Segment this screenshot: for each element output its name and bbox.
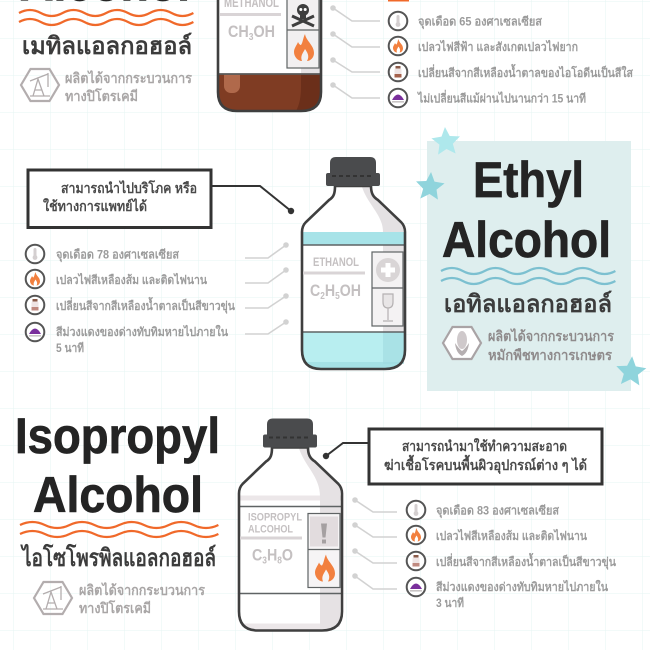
icon: iodine bottle xyxy=(389,63,407,81)
star xyxy=(431,126,461,155)
bottle: isopropyl: 8 xyxy=(277,556,282,566)
text: iodine: เปลี่ยนสีจากสีเหลืองน้ำตาลเป็นสีขาวขุ่น xyxy=(436,552,617,570)
property list: ethyl: 5 นาที xyxy=(56,341,84,355)
text: iodine: เปลี่ยนสีจากสีเหลืองน้ำตาลเป็นสีขาวขุ่น xyxy=(56,296,236,314)
title: Isopropyl xyxy=(15,408,220,464)
property list: ethyl xyxy=(26,243,288,355)
icon: thermometer xyxy=(407,501,425,519)
callout: ethanol use: สามารถนำไปบริโภค หรือ xyxy=(61,179,197,196)
star xyxy=(615,355,647,386)
panel: ethyl alcohol xyxy=(415,126,647,391)
connectors xyxy=(353,498,397,589)
star xyxy=(415,171,445,200)
bottle: isopropyl: 3 xyxy=(262,556,267,566)
title: Ethyl xyxy=(473,152,584,208)
bottle: methanol: CH xyxy=(228,22,253,41)
text: flame colour: เปลวไฟสีเหลืองส้ม และติดไฟนาน xyxy=(436,528,588,543)
callout: isopropyl use: ฆ่าเชื้อโรคบนพื้นผิวอุปกรณ์ต่าง ๆ ได้ xyxy=(384,454,587,474)
panel: ethyl alcohol: หมักพืชทางการเกษตร xyxy=(488,347,612,363)
callout: ethanol use xyxy=(28,170,294,228)
bottle: ethanol: H xyxy=(325,281,335,300)
label text: ISOPROPYL xyxy=(248,512,302,524)
text: flame colour: เปลวไฟสีฟ้า และสังเกตเปลวไฟยาก xyxy=(418,39,578,54)
text: flame colour: เปลวไฟสีเหลืองส้ม และติดไฟนาน xyxy=(56,272,208,287)
panel: methyl alcohol heading xyxy=(19,0,193,104)
callout: ethanol use: ใช้ทางการแพทย์ได้ xyxy=(43,197,147,214)
icon: oil pump hexagon xyxy=(21,69,59,101)
property list: isopropyl xyxy=(353,498,617,610)
icon: flame xyxy=(389,37,407,55)
wave divider blue xyxy=(441,268,615,284)
text: permanganate: สีม่วงแดงของด่างทับทิมหายไปภายใน xyxy=(436,579,609,594)
clipped orange title fragment xyxy=(388,0,409,2)
wave divider orange xyxy=(19,10,193,25)
icon: oil pump hexagon xyxy=(34,582,72,614)
icon: flame xyxy=(294,34,314,61)
bottle: isopropyl: C xyxy=(252,546,264,564)
Thai name: methyl: เมทิลแอลกอฮอล์ xyxy=(22,32,192,60)
bottle cap xyxy=(326,157,380,186)
icon: skull xyxy=(292,4,314,26)
bottle: isopropyl: ALCOHOL xyxy=(248,524,293,536)
icon: permanganate xyxy=(407,578,425,596)
wave divider orange xyxy=(20,522,218,537)
connectors xyxy=(331,6,380,98)
label text: ETHANOL xyxy=(313,255,359,269)
bottle: ethanol: OH xyxy=(340,281,361,300)
icon: corn hexagon xyxy=(443,327,481,359)
hazard label box xyxy=(287,0,319,68)
property list: isopropyl: 3 นาที xyxy=(436,596,464,610)
text: boiling point: จุดเดือด 65 องศาเซลเซียส xyxy=(418,14,543,30)
bottle cap xyxy=(263,418,317,448)
source text: ผลิตได้จากกระบวนการ xyxy=(488,327,614,344)
Thai name: ethyl: เอทิลแอลกอฮอล์ xyxy=(444,290,612,318)
text: boiling point: จุดเดือด 78 องศาเซลเซียส xyxy=(56,248,180,262)
icon: iodine bottle xyxy=(26,296,44,314)
icon: thermometer xyxy=(26,245,44,263)
callout: isopropyl use: สามารถนำมาใช้ทำความสะอาด xyxy=(402,437,567,454)
bottle: isopropyl: H xyxy=(267,546,277,564)
hazard label box xyxy=(372,252,403,326)
bottle: methanol: OH xyxy=(253,22,275,41)
source text: ผลิตได้จากกระบวนการ xyxy=(79,581,205,598)
hazard label box xyxy=(308,514,340,588)
callout: isopropyl use xyxy=(323,429,602,484)
bottle: isopropyl xyxy=(239,418,342,630)
icon: flame xyxy=(407,526,425,544)
bottle: methanol xyxy=(218,0,321,111)
panel: methyl alcohol heading: ทางปิโตรเคมี xyxy=(65,87,138,104)
connectors xyxy=(245,243,288,334)
icon: medical cross xyxy=(376,258,400,282)
icon: wine glass xyxy=(383,294,393,321)
bottle: ethanol: 2 xyxy=(320,291,325,302)
icon: permanganate xyxy=(26,323,44,341)
text: permanganate: ไม่เปลี่ยนสีแม้ผ่านไปนานกว่า 15 นาที xyxy=(416,90,586,106)
bottle: isopropyl: O xyxy=(282,546,293,564)
property list: methyl xyxy=(331,6,634,107)
bottle: methanol: 3 xyxy=(249,32,254,43)
icon: permanganate xyxy=(389,89,407,107)
panel: isopropyl heading: ทางปิโตรเคมี xyxy=(79,599,151,616)
panel: ethyl alcohol: Alcohol xyxy=(442,212,611,268)
text: permanganate: สีม่วงแดงของด่างทับทิมหายไปภายใน xyxy=(56,324,229,339)
panel: isopropyl heading: Alcohol xyxy=(33,467,203,523)
Thai name: isopropyl: ไอโซโพรพิลแอลกอฮอล์ xyxy=(20,543,216,572)
icon: exclamation xyxy=(310,516,338,546)
panel: isopropyl heading xyxy=(15,408,220,616)
icon: thermometer xyxy=(389,12,407,30)
bottle: ethanol xyxy=(302,157,405,369)
text: boiling point: จุดเดือด 83 องศาเซลเซียส xyxy=(436,504,560,518)
icon: flame xyxy=(315,554,335,582)
bottle: ethanol: C xyxy=(310,281,322,300)
icon: iodine bottle xyxy=(407,552,425,570)
bottle: ethanol: 5 xyxy=(335,291,340,302)
icon: flame xyxy=(26,270,44,288)
source text: ผลิตได้จากกระบวนการ xyxy=(65,69,192,86)
